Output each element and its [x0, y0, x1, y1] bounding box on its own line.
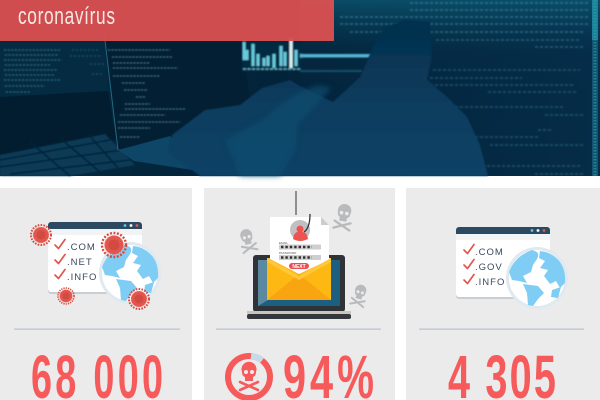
icon: 94% donut with skull [228, 356, 270, 398]
icon: browser with domains and globe [456, 227, 568, 309]
right edge binary stripe [592, 0, 598, 176]
title: coronavírus [18, 3, 115, 30]
icon: browser with domains and globe: .COM [475, 247, 504, 258]
laptop with code [104, 28, 250, 172]
left keyboard [0, 134, 135, 176]
icon: laptop with phishing email: EMAIL [279, 241, 288, 245]
hand on keyboard highlight [225, 85, 332, 176]
right side code [337, 3, 588, 174]
icon: browser with domains and viruses: .INFO [67, 272, 97, 283]
coronavírus title banner [0, 0, 334, 41]
icon: browser with domains and globe: .INFO [475, 277, 505, 288]
panel: government domains [406, 188, 600, 400]
hero photo: hacker at laptops [0, 0, 600, 176]
icon: browser with domains and globe: .GOV [475, 262, 503, 273]
icon: laptop with phishing email [238, 191, 369, 319]
bar chart screen [242, 38, 374, 72]
icon: browser with domains and viruses: .NET [67, 257, 93, 268]
hooded figure [168, 20, 488, 176]
icon: browser with domains and viruses: .COM [67, 242, 96, 253]
panel: phishing [204, 188, 395, 400]
icon: laptop with phishing email: NEXT [292, 264, 306, 270]
icon: laptop with phishing email: PASSWORD [279, 251, 297, 255]
icon: browser with domains and viruses [31, 222, 161, 309]
panel: domains registered [0, 188, 192, 400]
left monitor [0, 41, 116, 155]
